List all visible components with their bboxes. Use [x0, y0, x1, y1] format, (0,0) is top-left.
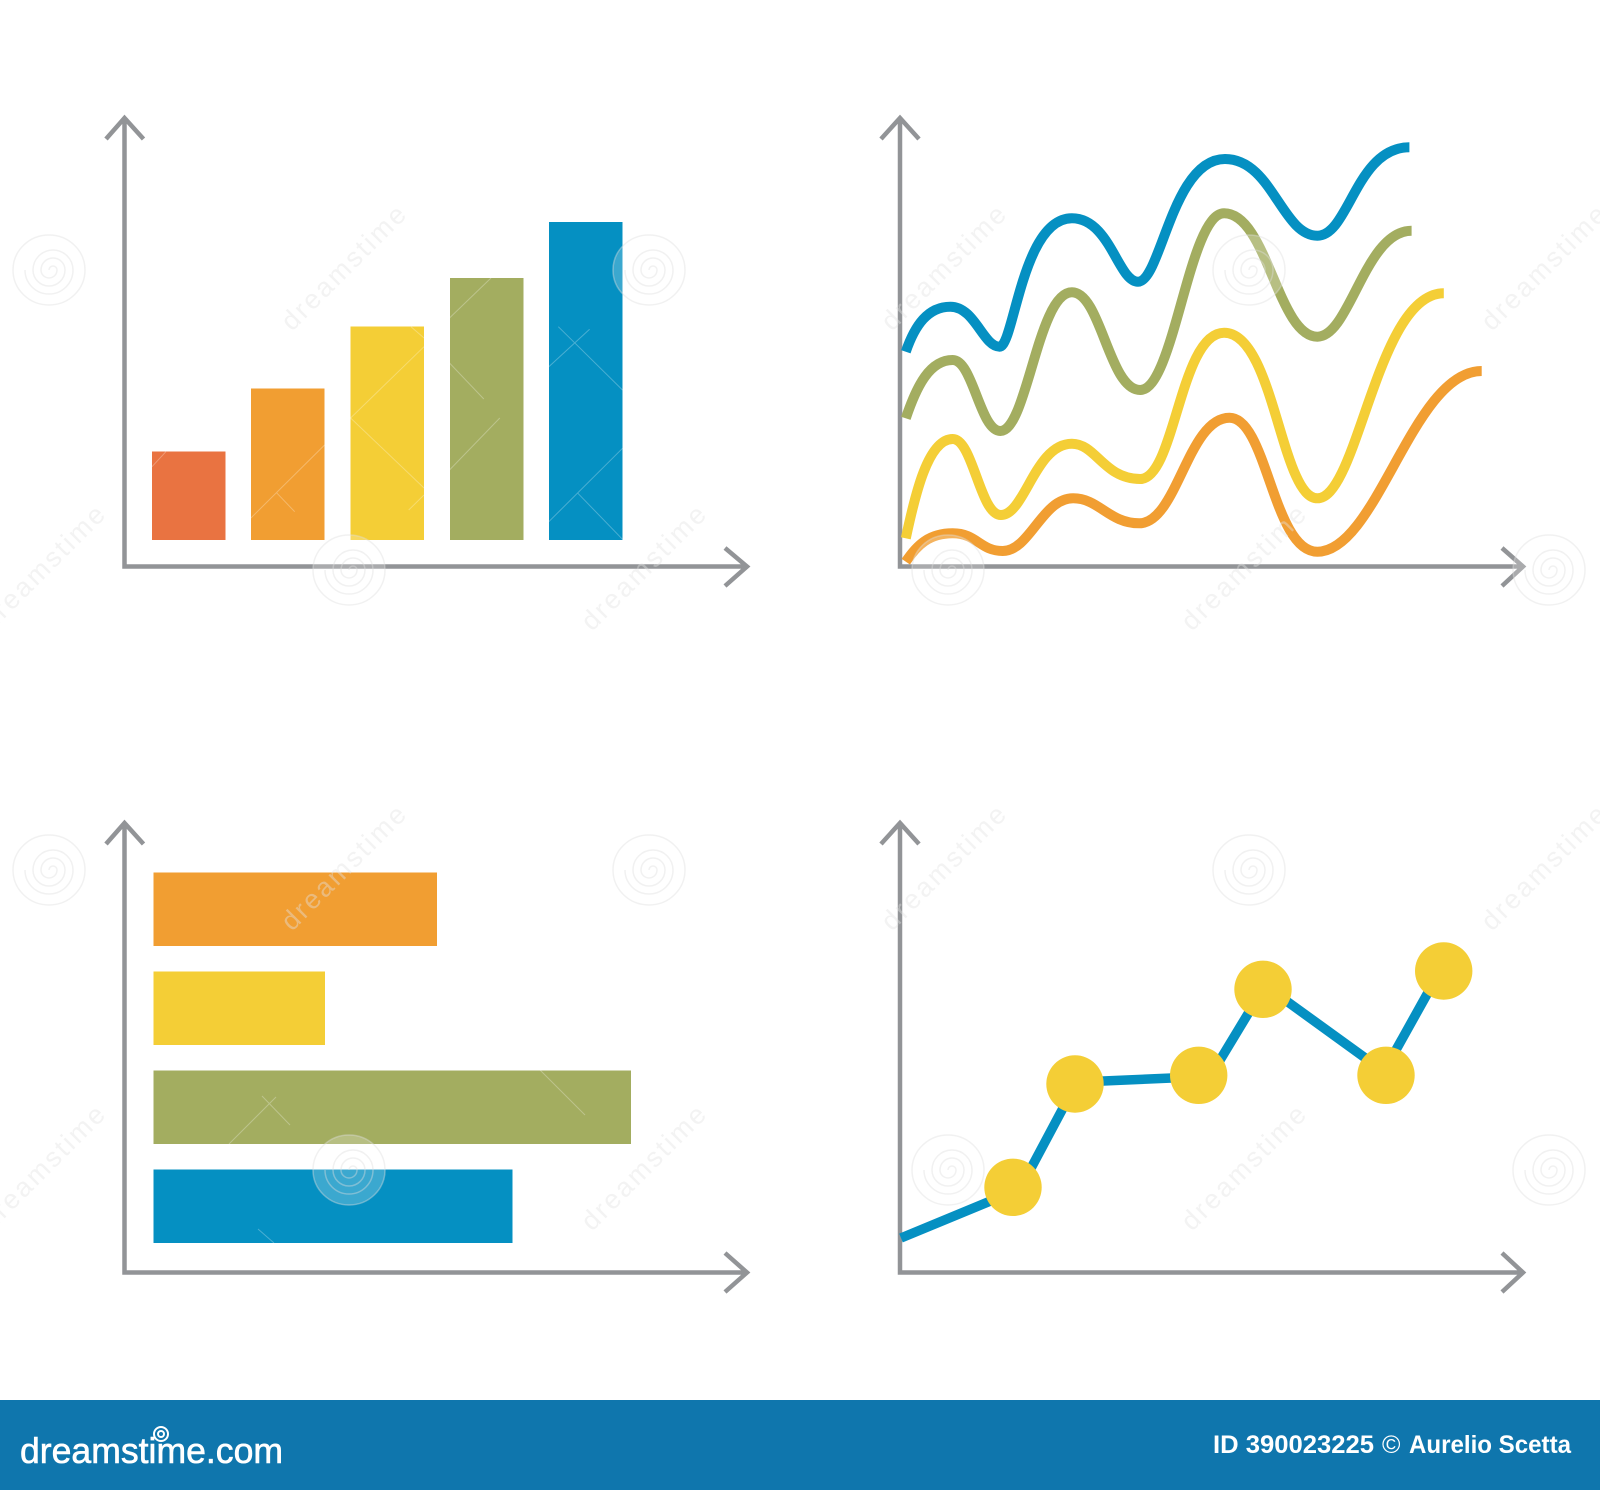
watermark overlay: dreamstime [875, 198, 1014, 336]
bar: orange [154, 872, 437, 946]
line: connecting segments [901, 971, 1440, 1238]
panel: horizontal bar chart [106, 823, 747, 1292]
panel: wave line chart [881, 118, 1523, 586]
axes: column chart [106, 118, 747, 586]
bar: yellow [154, 972, 325, 1045]
watermark overlay [0, 198, 1600, 1236]
footer bar [0, 1400, 1600, 1490]
panel: dot line chart [881, 823, 1523, 1292]
bar: blue [154, 1170, 512, 1243]
footer credit text: © [1382, 1431, 1401, 1459]
line: yellow wave [906, 293, 1444, 538]
watermark overlay: dreamstime [275, 798, 414, 936]
column: yellow [350, 326, 424, 540]
axes: wave chart [881, 118, 1523, 586]
column: blue [549, 222, 622, 540]
watermark overlay: dreamstime [1175, 1098, 1314, 1236]
axes: horizontal bar chart [106, 823, 747, 1292]
footer credit text [1213, 1431, 1572, 1459]
panel: column chart [106, 118, 747, 586]
line: green wave [906, 213, 1412, 431]
points: yellow markers [984, 942, 1472, 1216]
watermark overlay: dreamstime [275, 198, 414, 336]
column: red-orange [152, 452, 226, 540]
line: orange wave [906, 371, 1482, 562]
icon: logo spiral [154, 1427, 168, 1441]
bar: olive green [154, 1070, 631, 1144]
watermark overlay: dreamstime [875, 798, 1014, 936]
watermark overlay: dreamstime [575, 1098, 714, 1236]
footer credit text: ID 390023225 [1213, 1431, 1374, 1459]
axes: dot line chart [881, 823, 1523, 1292]
watermark overlay: dreamstime [575, 498, 714, 636]
column: olive green [450, 278, 524, 540]
column: orange [251, 388, 324, 540]
footer logo text: dreamstime.com [20, 1430, 283, 1471]
footer credit text: Aurelio Scetta [1409, 1431, 1572, 1459]
line: blue wave [906, 147, 1409, 352]
watermark overlay: dreamstime [1175, 498, 1314, 636]
